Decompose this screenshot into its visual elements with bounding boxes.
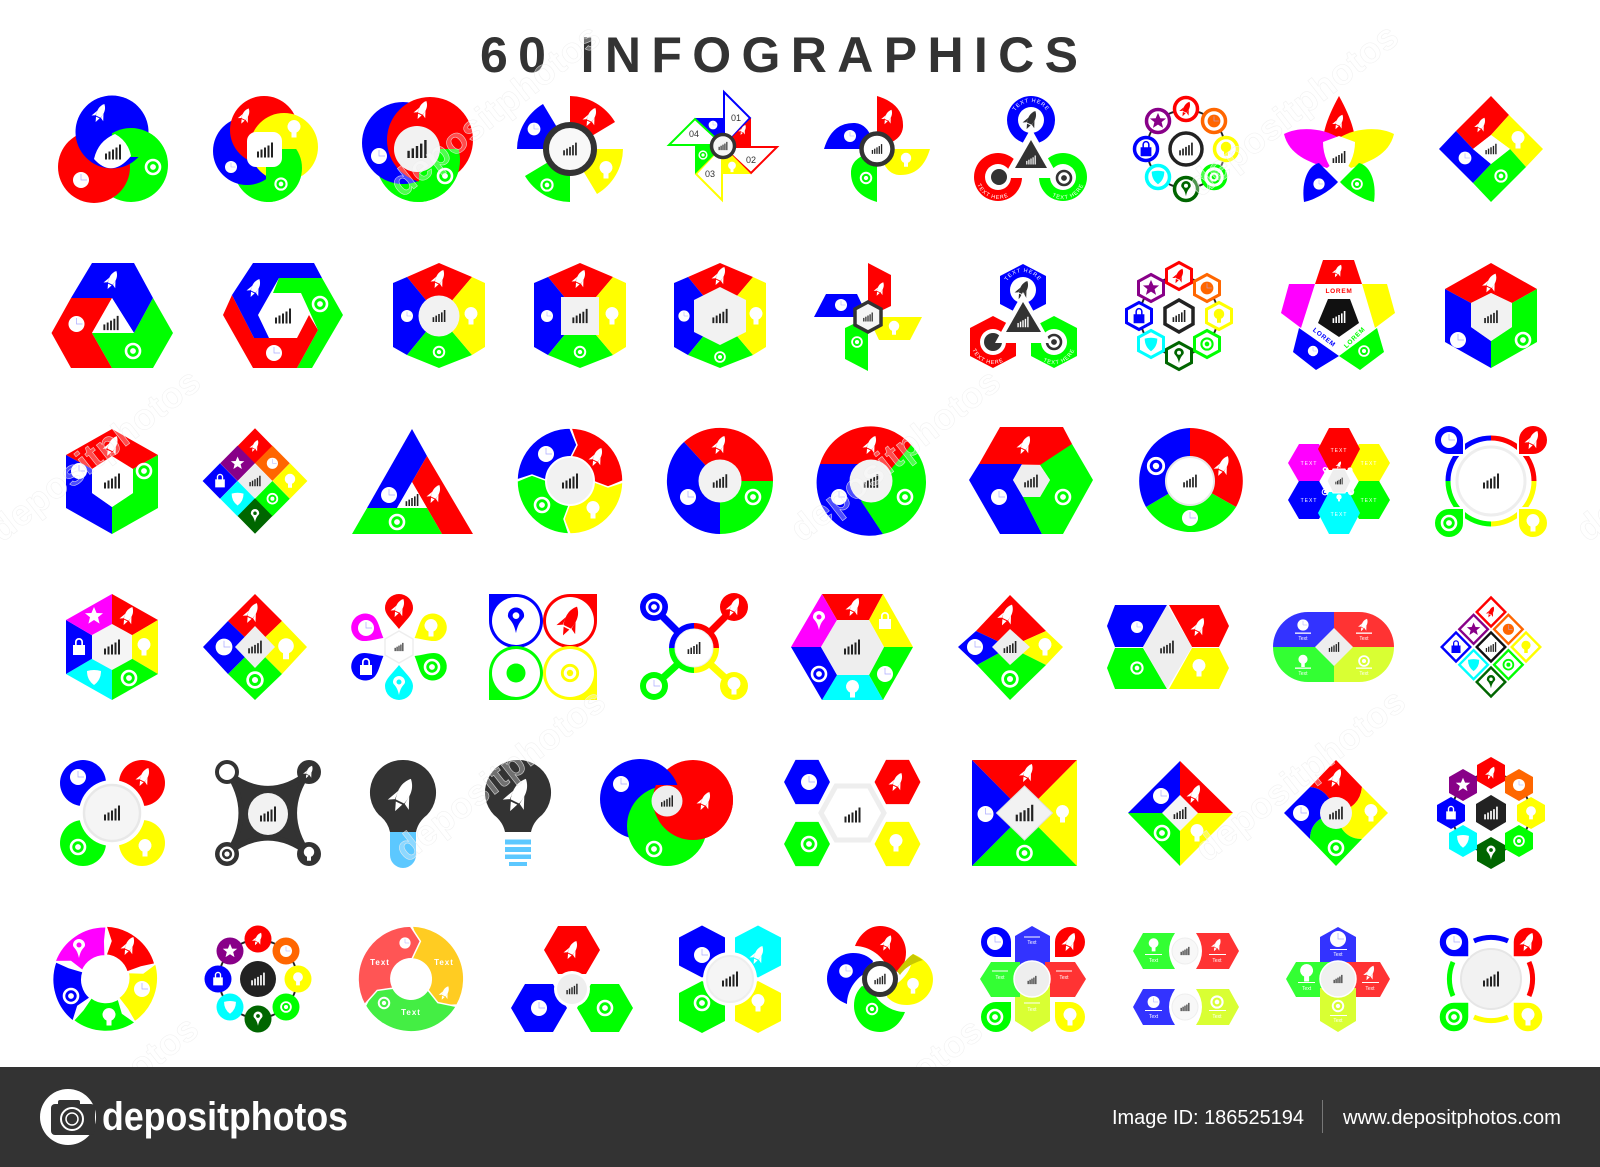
figure 58: four tabs around two discs	[1133, 933, 1239, 1025]
figure 54: three hexagons with centre disc	[511, 926, 633, 1032]
figure 58: four tabs around two discs: Text	[1212, 1014, 1222, 1020]
figure 58: four tabs around two discs: Text	[1212, 958, 1222, 964]
figure 19: pentagon frame with LOREM labels: LOREM	[1311, 327, 1337, 349]
figure 35: hub with four arms	[640, 593, 748, 700]
figure 51: five-part donut	[33, 915, 171, 1051]
figure 50: ring of eight filled hexagons	[1437, 757, 1545, 869]
figure 5: numbered outline pinwheel: 02	[746, 155, 756, 165]
watermark: repeated depositphotos text: depositphotos	[782, 360, 1008, 549]
figure 29: six hexagons with TEXT labels: TEXT	[1331, 448, 1347, 454]
figure 57: cross of labelled tabs and corner drops: Text	[995, 975, 1005, 981]
figure 57: cross of labelled tabs and corner drops: Text	[1027, 940, 1037, 946]
figure 29: six hexagons with TEXT labels: TEXT	[1331, 512, 1347, 518]
figure 2: four-circle swirl	[213, 96, 318, 202]
figure 57: cross of labelled tabs and corner drops: Text	[1059, 975, 1069, 981]
figure 59: four-arm labelled cross: Text	[1302, 986, 1312, 992]
figure 11: hexagon with triangle core	[52, 263, 173, 368]
figure 59: four-arm labelled cross: Text	[1365, 986, 1375, 992]
figure 45: three large circles swirl	[600, 759, 733, 866]
figure 6: rounded four-petal fan	[824, 96, 930, 202]
figure 9: five-petal star	[1284, 96, 1394, 202]
figure 40: nine outlined diamonds	[1442, 598, 1540, 696]
figure 29: six hexagons with TEXT labels: TEXT	[1301, 498, 1317, 504]
watermark: repeated depositphotos text: depositphotos	[382, 15, 608, 204]
figure 19: pentagon frame with LOREM labels: LOREM	[1326, 288, 1352, 295]
figure 8: ring of eight outlined circles	[1134, 98, 1238, 200]
figure 14: hexagon quarters with square core	[534, 263, 626, 368]
figure 17: three hexagon lobes with triangle: TEXT HERE	[972, 348, 1003, 364]
figure 22: nine-cell diamond	[203, 428, 307, 534]
figure 55: four point-top hexagons	[679, 926, 781, 1033]
figure 20: cube hexagon	[1445, 263, 1537, 368]
figure 29: six hexagons with TEXT labels: TEXT	[1361, 498, 1377, 504]
figure 21: cube hexagon white core	[66, 429, 158, 534]
figure 26: three-part swirl circle	[817, 426, 926, 536]
figure 37: diamond with small side quarters	[958, 595, 1063, 700]
figure 3: overlapping circles with centre disc	[362, 97, 473, 202]
figure 39: stadium with four parts	[1273, 612, 1394, 682]
watermark: repeated depositphotos text: depositphotos	[387, 680, 613, 869]
watermark: repeated depositphotos text: depositphotos	[1187, 680, 1413, 869]
figure 33: six drops around hexagon	[346, 594, 452, 700]
figure 7: three round lobes with triangle: TEXT HERE	[978, 183, 1008, 199]
figure 23: triangle	[352, 429, 473, 534]
footer bar: depositphotos	[102, 1095, 348, 1139]
figure 38: four half hexagons with centre diamond	[1107, 605, 1229, 689]
figure 16: angular four-arm pinwheel	[814, 263, 922, 371]
logo: camera badge	[40, 1089, 96, 1145]
figure 4: four-petal fan with dark ring	[517, 96, 623, 202]
figure 53: three-part donut with Text labels	[339, 920, 464, 1051]
title: 60 INFOGRAPHICS	[480, 27, 1078, 83]
figure 39: stadium with four parts: Text	[1359, 636, 1369, 642]
figure 25: three-part donut	[667, 428, 773, 534]
figure 24: four-part notched circle	[517, 428, 623, 534]
figure 7: three round lobes with triangle: TEXT HERE	[1053, 184, 1084, 200]
figure 7: three round lobes with triangle: TEXT HERE	[1012, 98, 1050, 110]
figure 29: six hexagons with TEXT labels: TEXT	[1301, 461, 1317, 467]
figure 58: four tabs around two discs: Text	[1149, 958, 1159, 964]
figure 39: stadium with four parts: Text	[1359, 671, 1369, 677]
figure 19: pentagon frame with LOREM labels	[1281, 260, 1395, 370]
figure 46: four hexagons with hollow centre	[784, 760, 920, 866]
figure 52: ring of eight filled circles	[204, 926, 312, 1032]
figure 48: diamond with four triangles	[1128, 761, 1233, 866]
figure 30: ring with four corner drops	[1434, 425, 1548, 538]
figure 44: light bulb striped base	[485, 760, 551, 866]
footer bar	[0, 1067, 1600, 1167]
figure 57: cross of labelled tabs and corner drops	[980, 926, 1086, 1032]
figure 60: grey disc with corner drops and arcs	[1439, 927, 1543, 1032]
watermark: repeated depositphotos text: depositphotos	[1180, 15, 1406, 204]
figure 5: numbered outline pinwheel: 04	[689, 129, 699, 139]
figure 43: light bulb solid base	[370, 760, 436, 868]
figure 42: dark four-node body	[215, 760, 321, 866]
figure 36: six-part hexagon frame	[791, 594, 913, 700]
figure 31: six-sector hexagon	[66, 594, 158, 700]
figure 41: four lobes around grey disc	[60, 760, 165, 866]
figure 53: three-part donut with Text labels: Text	[434, 958, 454, 967]
figure 5: numbered outline pinwheel	[669, 92, 777, 200]
figure 29: six hexagons with TEXT labels	[1288, 428, 1390, 534]
figure 59: four-arm labelled cross: Text	[1333, 1018, 1343, 1024]
figure 56: curved four-petal swirl	[827, 926, 933, 1032]
figure 5: numbered outline pinwheel: 03	[705, 169, 715, 179]
figure 39: stadium with four parts: Text	[1298, 636, 1308, 642]
figure 59: four-arm labelled cross: Text	[1333, 952, 1343, 958]
figure 53: three-part donut with Text labels: Text	[401, 1008, 421, 1017]
figure 49: diamond with curved parts	[1284, 760, 1388, 866]
figure 12: interlocked hexagon frame	[223, 263, 343, 368]
figure 17: three hexagon lobes with triangle: TEXT HERE	[1004, 268, 1042, 280]
figure 5: numbered outline pinwheel: 01	[731, 113, 741, 123]
figure 57: cross of labelled tabs and corner drops: Text	[1027, 1007, 1037, 1013]
figure 32: diamond quarters	[203, 594, 307, 700]
figure 18: ring of eight outlined hexagons	[1126, 262, 1232, 370]
footer bar: www.depositphotos.com	[1342, 1107, 1561, 1129]
figure 59: four-arm labelled cross	[1286, 927, 1390, 1032]
figure 53: three-part donut with Text labels: Text	[370, 958, 390, 967]
figure 10: pinwheel diamond	[1439, 96, 1543, 202]
figure 27: three-part hexagon	[969, 427, 1093, 534]
figure 29: six hexagons with TEXT labels: TEXT	[1361, 461, 1377, 467]
figure 15: hexagon quarters with hexagon core	[674, 263, 766, 368]
figure 17: three hexagon lobes with triangle: TEXT HERE	[1044, 349, 1074, 364]
figure 7: three round lobes with triangle	[974, 96, 1087, 201]
figure 13: hexagon quarters with round core	[393, 263, 485, 368]
figure 58: four tabs around two discs: Text	[1149, 1014, 1159, 1020]
figure 17: three hexagon lobes with triangle	[970, 264, 1077, 368]
figure 1: three-circle swirl	[58, 96, 168, 203]
figure 47: square with four triangles	[972, 760, 1077, 866]
footer bar: Image ID: 186525194	[1112, 1107, 1304, 1129]
figure 34: four rings with square corners	[489, 594, 597, 700]
figure 28: three-part donut rotated	[1139, 428, 1243, 532]
figure 39: stadium with four parts: Text	[1298, 671, 1308, 677]
figure 19: pentagon frame with LOREM labels: LOREM	[1343, 326, 1367, 350]
